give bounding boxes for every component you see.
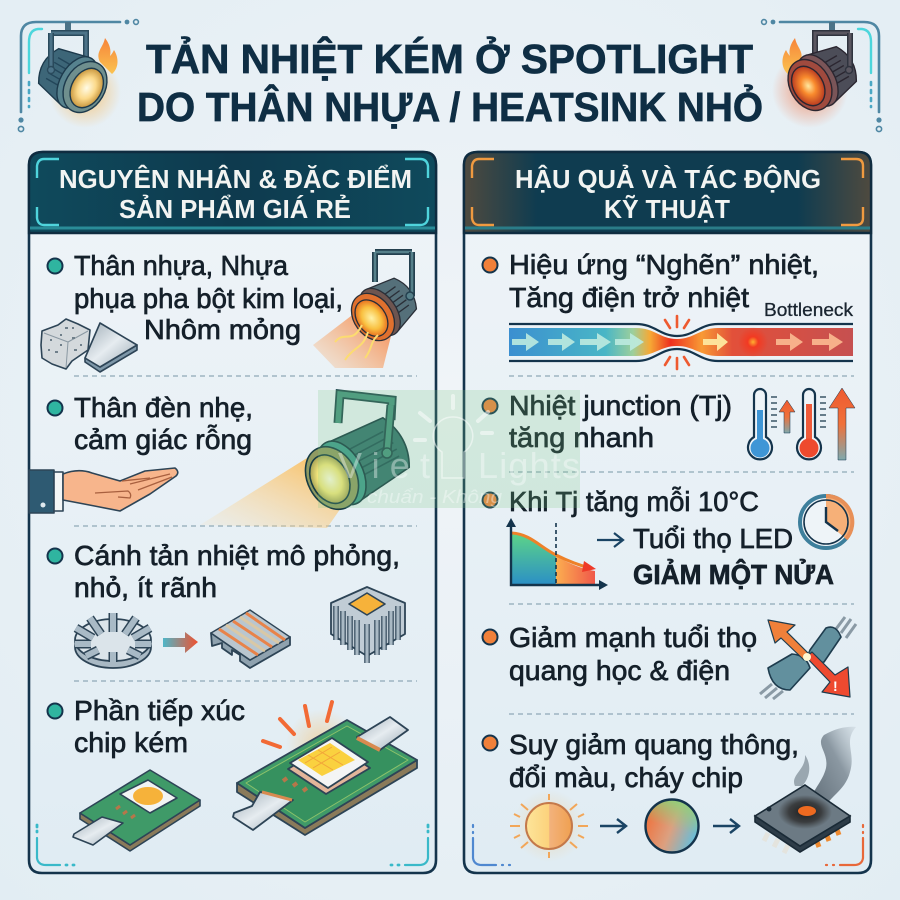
icon: large circuit board with heated LED bbox=[233, 702, 417, 835]
title: DO THÂN NHỰA / HEATSINK NHỎ bbox=[137, 84, 763, 130]
bullet item: optical and electrical life: quang học & điện bbox=[509, 655, 730, 686]
bullet item: lumen decline and burn: Suy giảm quang thông, bbox=[509, 729, 799, 760]
title bbox=[137, 36, 763, 130]
bullet item: lumen decline and burn bbox=[482, 729, 799, 793]
diagram: thermal bottleneck pipe bbox=[509, 316, 853, 369]
icon: spotlight warm top left bbox=[29, 22, 121, 128]
bullet item: lumen decline and burn: đổi màu, cháy chip bbox=[509, 762, 743, 793]
icon: colour shift circle bbox=[646, 800, 698, 852]
bullet item: thermal bottleneck: Hiệu ứng “Nghẽn” nhiệt, bbox=[509, 249, 819, 280]
panel header: consequences bbox=[464, 152, 871, 233]
title: TẢN NHIỆT KÉM Ở SPOTLIGHT bbox=[146, 36, 753, 82]
bullet item: poor chip contact: chip kém bbox=[74, 727, 188, 758]
icon: finned heatsink with chip bbox=[331, 587, 405, 663]
panel header: consequences: HẬU QUẢ VÀ TÁC ĐỘNG bbox=[515, 164, 821, 194]
icon: sun bbox=[510, 790, 588, 862]
panel: consequences bbox=[464, 152, 871, 873]
bullet item: simulated heatsink fins: nhỏ, ít rãnh bbox=[74, 572, 217, 603]
icon: failing connector with arrows bbox=[760, 617, 856, 699]
watermark: Viet Lights: chuẩn - Không bbox=[367, 487, 502, 507]
header frame decoration left bbox=[18, 20, 138, 132]
corner brackets bbox=[473, 825, 863, 865]
bullet item: simulated heatsink fins bbox=[48, 540, 400, 603]
panel header: causes: SẢN PHẨM GIÁ RẺ bbox=[119, 194, 351, 224]
bullet item: junction temperature: Nhiệt junction (Tj) bbox=[509, 390, 732, 421]
panel header: causes: NGUYÊN NHÂN & ĐẶC ĐIỂM bbox=[59, 164, 412, 194]
icon: green spotlight with beam bbox=[200, 394, 419, 528]
icon: round heatsink bbox=[75, 613, 151, 668]
arrow: leads to lifetime bbox=[597, 533, 623, 547]
icon: failing connector with arrows: ! bbox=[833, 678, 838, 694]
header frame decoration right bbox=[762, 20, 882, 132]
icon: spotlight overheated top right bbox=[772, 22, 866, 128]
bullet item: thermal bottleneck bbox=[482, 249, 819, 313]
panel: causes bbox=[29, 152, 436, 873]
bullet item: optical and electrical life: Giảm mạnh tuổi thọ bbox=[509, 622, 757, 653]
bullet item: lifetime halves: GIẢM MỘT NỬA bbox=[633, 558, 834, 590]
bullet item: lifetime halves: Khi Tj tăng mỗi 10°C bbox=[509, 486, 759, 517]
bullet item: junction temperature: tăng nhanh bbox=[509, 422, 654, 453]
icon: hot spotlight with heat beam bbox=[313, 252, 426, 368]
chart: lifetime decline curve bbox=[506, 518, 608, 590]
icon: small rectangular heatsink bbox=[211, 610, 290, 668]
panel header: causes bbox=[29, 152, 436, 233]
bullet item: plastic body bbox=[48, 250, 343, 345]
arrow: heatsink comparison bbox=[163, 632, 198, 653]
watermark: Viet Lights: Lights bbox=[478, 445, 580, 486]
watermark: Viet Lights bbox=[318, 390, 580, 508]
icon: burnt chip with smoke bbox=[755, 727, 856, 853]
watermark: Viet Lights: Viet bbox=[338, 445, 430, 486]
bullet item: lifetime halves: Tuổi thọ LED bbox=[633, 523, 793, 554]
bullet item: poor chip contact bbox=[48, 695, 245, 758]
arrow: colour shift to burnt chip bbox=[713, 819, 739, 833]
icon: metal powder and thin aluminium bbox=[41, 319, 137, 372]
bullet item: light body: Thân đèn nhẹ, bbox=[74, 392, 253, 423]
bullet item: poor chip contact: Phần tiếp xúc bbox=[74, 695, 245, 726]
icon: clock bbox=[800, 496, 852, 548]
icon: open hand bbox=[29, 468, 178, 513]
bullet item: plastic body: Thân nhựa, Nhựa bbox=[74, 250, 288, 281]
bullet item: light body bbox=[48, 392, 253, 455]
icon: thermometers and rising arrows bbox=[748, 388, 855, 460]
label: bottleneck: Bottleneck bbox=[764, 300, 854, 320]
bullet item: optical and electrical life bbox=[482, 622, 757, 686]
bullet item: junction temperature bbox=[482, 390, 732, 453]
bullet item: light body: cảm giác rỗng bbox=[74, 424, 252, 455]
corner brackets bbox=[37, 825, 428, 865]
panel header: consequences: KỸ THUẬT bbox=[604, 194, 730, 224]
bullet item: plastic body: Nhôm mỏng bbox=[144, 314, 301, 345]
icon: small circuit board with LED bbox=[73, 770, 200, 851]
bullet item: lifetime halves bbox=[482, 486, 834, 590]
bullet item: thermal bottleneck: Tăng điện trở nhiệt bbox=[509, 282, 749, 313]
bullet item: simulated heatsink fins: Cánh tản nhiệt mô phỏng, bbox=[74, 540, 400, 571]
arrow: sun to colour shift bbox=[600, 819, 626, 833]
bullet item: plastic body: phụa pha bột kim loại, bbox=[74, 283, 343, 314]
